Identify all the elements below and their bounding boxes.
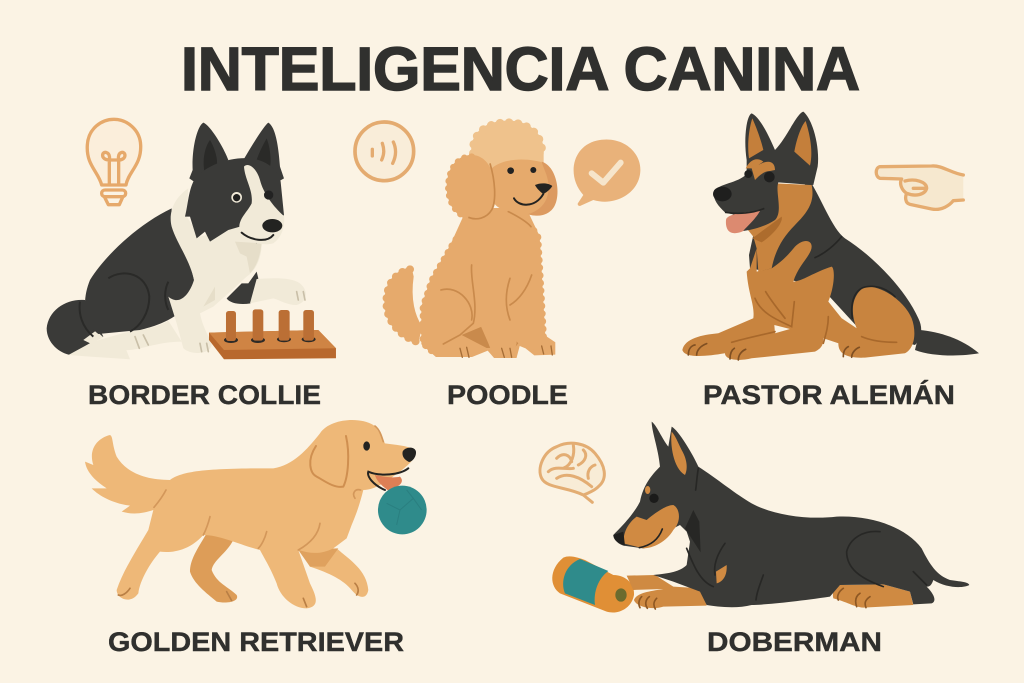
tan muzzle <box>623 505 679 548</box>
leg lines <box>732 292 897 343</box>
chest tan spot <box>716 565 727 583</box>
label: golden retriever: GOLDEN RETRIEVER <box>108 627 404 657</box>
mouth and tongue <box>375 475 402 491</box>
dog: poodle <box>386 123 558 357</box>
head and ears <box>714 112 818 231</box>
title: INTELIGENCIA CANINA <box>181 35 860 103</box>
puzzle: wooden peg board <box>209 309 336 359</box>
tan body and legs <box>682 241 914 360</box>
ear <box>448 157 494 219</box>
shading lines <box>687 468 927 600</box>
label: doberman: DOBERMAN <box>707 627 882 657</box>
front legs <box>473 267 517 356</box>
collar shadow <box>752 217 782 242</box>
hind paw <box>120 321 182 350</box>
body <box>85 208 195 334</box>
tail <box>915 330 979 355</box>
label: border collie: BORDER COLLIE <box>88 380 321 410</box>
icon: sound waves <box>355 122 414 181</box>
tail <box>386 269 420 342</box>
body, head and tail <box>85 420 415 608</box>
far hind leg <box>190 533 237 603</box>
dog: doberman <box>613 422 969 609</box>
body <box>423 210 553 356</box>
dog: pastor aleman <box>682 112 979 360</box>
back and saddle <box>749 178 921 345</box>
nose and eye <box>402 448 416 462</box>
fur lines <box>154 426 383 550</box>
tongue <box>726 211 760 233</box>
ears <box>189 123 284 182</box>
head <box>185 158 284 243</box>
icon: pointing hand <box>876 166 963 209</box>
icon: speech bubble with check <box>574 140 640 206</box>
label: poodle: POODLE <box>447 380 568 410</box>
tail <box>47 300 103 355</box>
icon: brain <box>540 443 604 502</box>
head <box>492 160 555 216</box>
dog: golden retriever <box>85 420 416 608</box>
dog: border collie <box>47 123 306 359</box>
eye and brow <box>649 494 659 503</box>
throat shadow <box>685 510 701 552</box>
near front leg <box>300 548 368 597</box>
white chest and front leg <box>168 188 262 353</box>
ball: teal <box>378 486 427 534</box>
gap between legs <box>774 325 790 333</box>
back paws <box>833 584 913 608</box>
icon: lightbulb <box>87 119 141 205</box>
fur lines <box>441 212 532 344</box>
neck tan <box>747 177 813 272</box>
topknot <box>473 123 542 167</box>
muzzle and blaze <box>239 165 284 244</box>
chest shading <box>203 242 262 307</box>
shadowed far paw <box>462 327 518 348</box>
front leg <box>627 575 707 608</box>
ear inner <box>671 432 687 475</box>
toy: roller <box>552 556 634 612</box>
face <box>507 167 514 174</box>
ear <box>310 436 348 487</box>
body and head <box>613 422 969 607</box>
label: pastor aleman: PASTOR ALEMÁN <box>703 379 955 410</box>
raised paw <box>227 272 258 304</box>
